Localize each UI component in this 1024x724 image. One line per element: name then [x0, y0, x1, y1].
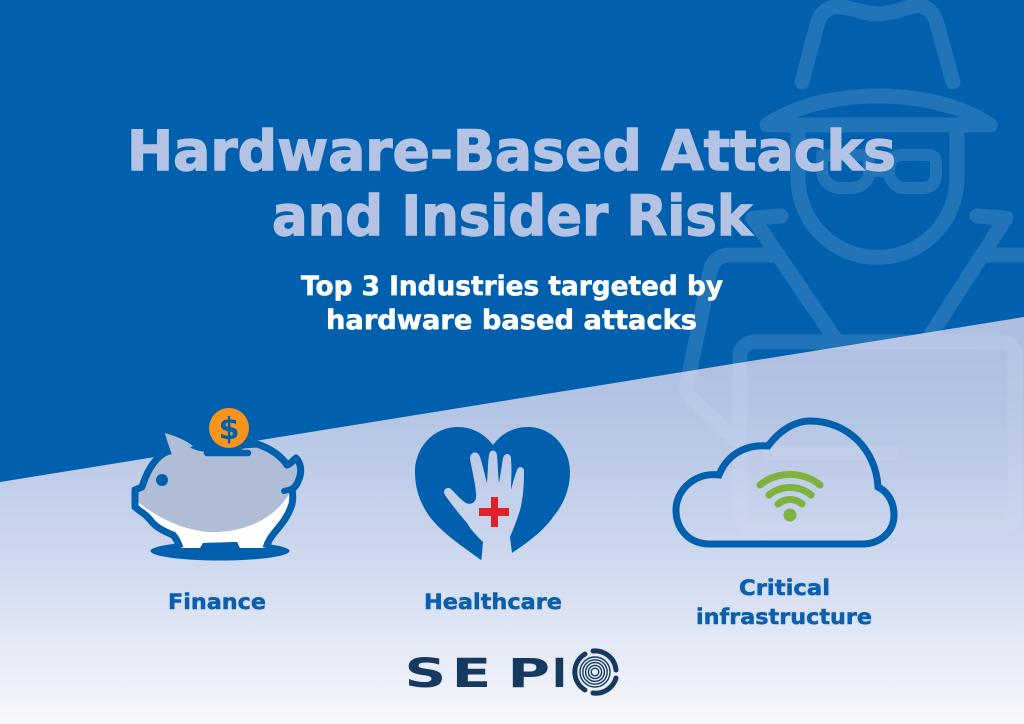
heart	[415, 427, 570, 560]
logo wordmark: SEP	[405, 650, 550, 697]
icon: cloud with wifi	[676, 421, 894, 544]
label: Critical infrastructure: infrastructure	[696, 605, 872, 629]
pig body	[130, 430, 305, 549]
subtitle	[301, 271, 723, 336]
label: Critical infrastructure: Critical	[739, 576, 830, 600]
title: Hardware-Based Attacks	[127, 119, 896, 183]
logo fingerprint O	[575, 651, 616, 693]
icon: heart with hand	[415, 427, 570, 564]
icon: insider spy watermark	[682, 0, 1024, 372]
pig shadow	[150, 542, 290, 560]
label: Healthcare: Healthcare	[424, 590, 562, 614]
pig eye	[156, 474, 168, 486]
wifi symbol	[760, 474, 820, 522]
background: light diagonal panel	[0, 317, 1024, 724]
coin with dollar sign: $	[219, 412, 239, 447]
coin with dollar sign	[204, 403, 254, 453]
title: and Insider Risk	[272, 184, 753, 248]
label: Critical infrastructure	[696, 576, 872, 629]
logo wordmark: I	[552, 651, 567, 697]
hand	[444, 450, 524, 564]
subtitle: Top 3 Industries targeted by	[301, 271, 723, 302]
subtitle: hardware based attacks	[326, 305, 697, 336]
title	[127, 119, 896, 248]
icon: piggy bank	[130, 403, 305, 560]
red cross	[479, 497, 509, 527]
label: Finance: Finance	[168, 590, 266, 614]
cloud outline	[676, 421, 894, 544]
coin slot	[207, 450, 248, 456]
logo: SEPIO	[405, 650, 616, 697]
